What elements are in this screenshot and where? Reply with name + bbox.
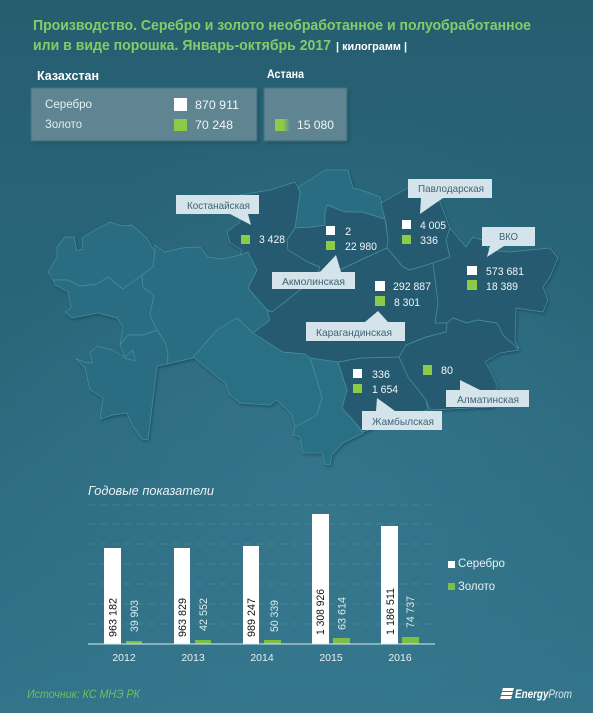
- callout: Karaganda: 292 887: [393, 281, 431, 293]
- region: North Kazakhstan: [295, 170, 387, 228]
- chart legend: Серебро: [458, 558, 505, 570]
- bars 2013: 963 829: [177, 598, 189, 637]
- callout: Kostanay: Костанайская: [187, 200, 250, 212]
- chart heading: Годовые показатели: [88, 483, 214, 498]
- region: Karaganda: [253, 248, 447, 362]
- bar chart: annual production: [88, 514, 435, 664]
- callout: Zhambyl: 336: [372, 369, 390, 381]
- bars 2012: [104, 548, 142, 664]
- callout: East Kazakhstan: [467, 227, 535, 293]
- callout: Almaty: Алматинская: [457, 394, 519, 406]
- bars 2015: 2015: [319, 652, 343, 664]
- callout: Akmola: [272, 226, 377, 289]
- region: Atyrau: [53, 275, 157, 345]
- bars 2014: 989 247: [246, 598, 258, 637]
- callout: Pavlodar: 336: [420, 235, 438, 247]
- panel: Astana totals: 15 080: [297, 120, 334, 132]
- callout: Karaganda: Карагандинская: [316, 327, 392, 339]
- callout: Kostanay: 3 428: [259, 234, 285, 246]
- bars 2012: 963 182: [108, 598, 120, 637]
- title: или в виде порошка. Январь-октябрь 2017: [33, 37, 331, 54]
- logo: EnergyProm: [500, 688, 572, 701]
- callout: Pavlodar: 4 005: [420, 220, 446, 232]
- bars 2014: 50 339: [269, 600, 281, 632]
- panel: Kazakhstan totals: 870 911: [195, 100, 239, 112]
- region: West Kazakhstan: [48, 222, 155, 289]
- bars 2016: 74 737: [405, 596, 417, 628]
- title: | килограмм |: [336, 41, 407, 53]
- callout: East Kazakhstan: 573 681: [486, 266, 524, 278]
- region: East Kazakhstan: [433, 228, 558, 348]
- region: Zhambyl: [338, 357, 428, 432]
- callout: Karaganda: 8 301: [394, 297, 420, 309]
- region: Kyzylorda: [193, 318, 322, 427]
- callout: Pavlodar: [402, 179, 492, 247]
- panel: Kazakhstan totals: Серебро: [45, 99, 92, 111]
- logo: EnergyProm: EnergyProm: [515, 689, 572, 701]
- region: Kostanay: [227, 182, 320, 312]
- title: [33, 17, 531, 54]
- callout: East Kazakhstan: ВКО: [499, 231, 518, 243]
- callout: Kostanay: [176, 195, 285, 246]
- panel: Kazakhstan totals: Казахстан: [37, 68, 99, 83]
- panel: Kazakhstan totals: Золото: [45, 119, 82, 131]
- bars 2016: 1 186 511: [385, 588, 397, 635]
- region: Aktobe: [142, 245, 270, 364]
- callout: Almaty: 80: [441, 365, 453, 377]
- panel: Astana totals: Астана: [267, 67, 304, 81]
- bars 2016: 2016: [388, 652, 412, 664]
- map of Kazakhstan: [48, 170, 558, 465]
- region: South Kazakhstan: [293, 358, 363, 465]
- callout: Akmola: 2: [345, 226, 351, 238]
- callout: Pavlodar: Павлодарская: [418, 183, 484, 195]
- chart legend: [448, 558, 505, 593]
- bars 2012: 39 903: [129, 600, 141, 632]
- region: Mangystau: [76, 330, 168, 440]
- callout: Akmola: 22 980: [345, 241, 377, 253]
- callout: Karaganda: [306, 281, 431, 341]
- bars 2013: 2013: [181, 652, 205, 664]
- panel: Astana totals: [264, 67, 349, 143]
- chart legend: Золото: [458, 581, 495, 593]
- bars 2016: [381, 526, 419, 664]
- panel: Kazakhstan totals: 70 248: [195, 120, 233, 132]
- source note: Источник: КС МНЭ РК: [27, 687, 141, 701]
- callout: East Kazakhstan: 18 389: [486, 281, 518, 293]
- bars 2013: [174, 548, 211, 664]
- bars 2015: 1 308 926: [315, 589, 327, 635]
- region: Akmola: [287, 205, 388, 272]
- callout: Akmola: Акмолинская: [282, 276, 345, 288]
- icon: logo stripes: [500, 688, 514, 699]
- callout: Zhambyl: Жамбылская: [372, 416, 434, 428]
- callout: Almaty: [423, 365, 529, 407]
- bars 2012: 2012: [112, 652, 136, 664]
- bars 2014: [243, 546, 281, 664]
- bars 2013: 42 552: [198, 598, 210, 631]
- region: Almaty: [399, 318, 519, 410]
- callout: Zhambyl: [353, 369, 442, 430]
- title: Производство. Серебро и золото необработанное и полуобработанное: [33, 17, 531, 34]
- bars 2015: [312, 514, 350, 664]
- region: Pavlodar: [381, 188, 450, 270]
- bars 2015: 63 614: [336, 597, 348, 630]
- bars 2014: 2014: [250, 652, 274, 664]
- panel: Kazakhstan totals: [31, 68, 259, 143]
- callout: Zhambyl: 1 654: [372, 384, 398, 396]
